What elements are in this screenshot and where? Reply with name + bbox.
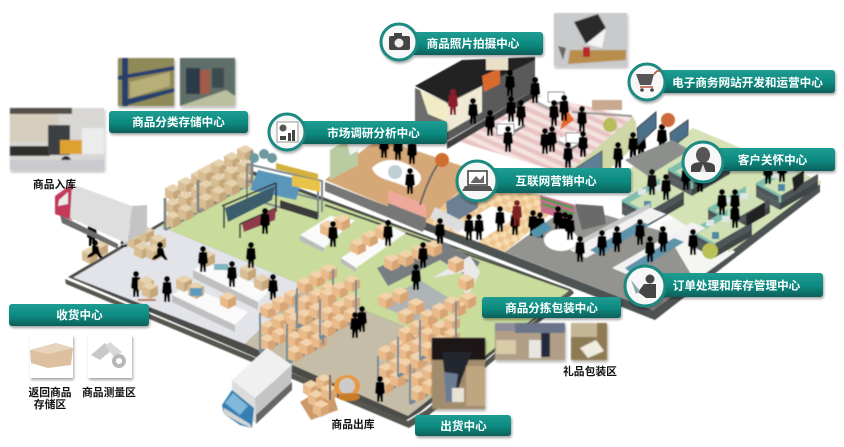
label: 商品照片拍摄中心 with camera icon	[381, 24, 543, 60]
clothes rails	[222, 183, 276, 238]
label: 互联网营销中心 with laptop icon: 互联网营销中心	[515, 174, 597, 188]
label: 出货中心: 出货中心	[440, 419, 487, 433]
label: 商品分类存储中心: 商品分类存储中心	[132, 115, 225, 129]
photo: worker loading parcels	[432, 338, 485, 409]
label: 电子商务网站开发和运营中心 with cart icon: 电子商务网站开发和运营中心	[672, 76, 823, 90]
receiving tables	[131, 242, 278, 332]
label: 订单处理和库存管理中心 with operator icon	[625, 266, 823, 306]
label: 商品照片拍摄中心 with camera icon: 商品照片拍摄中心	[427, 36, 520, 50]
photo: product studio	[554, 13, 627, 66]
inbound beige shelves	[165, 145, 253, 230]
inbound boxes and workers	[82, 210, 168, 264]
label: 商品分拣包装中心: 商品分拣包装中心	[505, 301, 598, 315]
icon tile: returned goods box	[30, 335, 73, 378]
packing tables	[300, 214, 480, 325]
icon tile: measuring tools	[88, 335, 132, 378]
caption: 返回商品存储区: 返回商品	[28, 387, 72, 399]
label: 市场调研分析中心 with chart icon	[269, 114, 447, 150]
internet marketing area	[430, 182, 606, 242]
label: 出货中心	[415, 415, 511, 436]
label: 收货中心: 收货中心	[56, 308, 103, 322]
label: 互联网营销中心 with laptop icon	[457, 161, 631, 201]
lower warehouse floor	[65, 170, 574, 428]
office desks and people	[485, 77, 690, 180]
label: 收货中心	[9, 304, 149, 326]
caption: 商品测量区: 商品测量区	[82, 385, 136, 399]
label: 商品分拣包装中心	[482, 297, 621, 318]
pallet and orange forklift	[300, 374, 360, 420]
blue delivery truck	[222, 348, 292, 428]
photo studio room	[415, 57, 535, 149]
warehouse and office floor scene	[55, 57, 822, 428]
label: 客户关怀中心 with agent icon: 客户关怀中心	[738, 153, 808, 167]
label: 客户关怀中心 with agent icon	[683, 142, 835, 182]
label: 订单处理和库存管理中心 with operator icon: 订单处理和库存管理中心	[673, 278, 801, 292]
photos: storage shelves	[118, 58, 235, 106]
caption: 商品出库: 商品出库	[331, 417, 375, 431]
merchandise rack	[247, 149, 322, 220]
market research room	[330, 124, 449, 228]
photo: gift wrapping	[571, 323, 607, 360]
order processing desks	[530, 203, 718, 274]
photo: forklift at truck	[10, 108, 104, 170]
upper office floor base	[325, 93, 822, 320]
label: 商品分类存储中心	[109, 111, 248, 133]
caption: 商品入库: 商品入库	[33, 177, 76, 191]
label: 市场调研分析中心 with chart icon: 市场调研分析中心	[327, 126, 420, 140]
caption: 返回商品存储区: 存储区	[34, 397, 66, 411]
photo: packing workers	[495, 323, 565, 360]
caption: 礼品包装区: 礼品包装区	[563, 364, 617, 378]
label: 电子商务网站开发和运营中心 with cart icon	[629, 64, 835, 100]
white delivery truck	[55, 184, 147, 249]
outbound orange shelves	[260, 264, 460, 404]
customer care cubicles	[622, 147, 818, 258]
